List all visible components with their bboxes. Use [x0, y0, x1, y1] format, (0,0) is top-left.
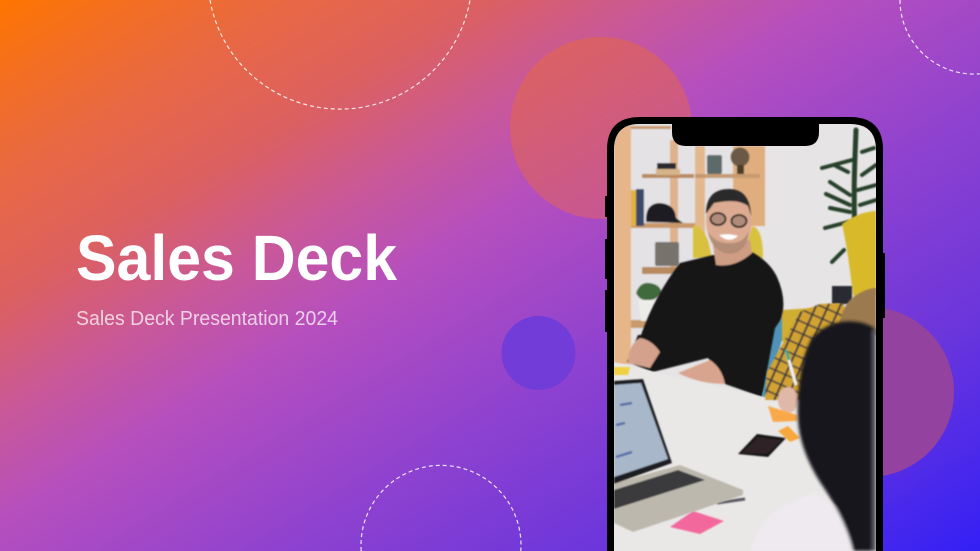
- sticky notes and table phone: [614, 367, 800, 534]
- subtitle: Sales Deck Presentation 2024: [76, 308, 338, 330]
- white shirt: [750, 492, 858, 551]
- dark stand: [832, 286, 852, 304]
- sweater: [627, 252, 783, 397]
- right plant: [822, 130, 876, 262]
- yellow seat: [780, 308, 812, 345]
- head: [706, 200, 752, 244]
- blue chair strip: [762, 318, 782, 398]
- hand: [778, 387, 798, 413]
- laptop: [614, 379, 743, 532]
- dashed circle: bottom: [361, 465, 521, 551]
- violet circle: [502, 316, 576, 390]
- right forearm: [678, 360, 725, 384]
- yellow chair behind man: [693, 226, 763, 258]
- foreground woman: [750, 321, 876, 551]
- phone notch: [672, 120, 819, 146]
- keyboard: [614, 470, 705, 509]
- bookshelf: [614, 124, 765, 364]
- table base: [614, 424, 876, 551]
- table: [614, 362, 766, 399]
- phone body: [607, 117, 883, 551]
- wall: [614, 124, 876, 424]
- phone side buttons: [605, 196, 885, 332]
- phone mockup: [605, 117, 885, 551]
- dashed circle: top: [210, 0, 470, 109]
- blond head: [838, 288, 876, 335]
- man: [627, 189, 783, 397]
- salmon circle: [510, 37, 692, 219]
- smile: [719, 234, 738, 240]
- laptop display: [614, 383, 668, 477]
- title: Sales Deck: [76, 222, 397, 294]
- left forearm: [628, 338, 660, 368]
- plaid person: [765, 288, 876, 413]
- plum circle: [784, 307, 954, 477]
- dashed circle: top right: [900, 0, 980, 74]
- phone screen photo: office meeting: [614, 124, 876, 551]
- plaid shirt: [765, 303, 850, 400]
- shelf items: [631, 190, 636, 226]
- laptop base: [614, 465, 743, 532]
- glasses: [710, 213, 746, 227]
- stubble: [708, 232, 749, 254]
- hair: [706, 189, 751, 216]
- neck: [713, 240, 752, 266]
- yellow armchair right: [842, 211, 876, 296]
- dark hair: [798, 321, 876, 551]
- pen: [786, 350, 796, 385]
- laptop lid: [614, 379, 672, 484]
